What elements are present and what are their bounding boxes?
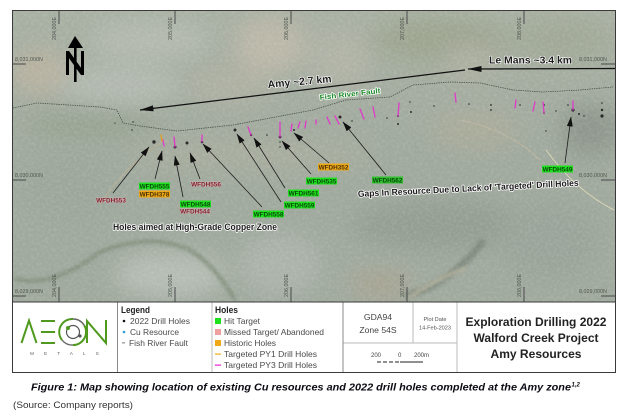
map title: Exploration Drilling 2022 xyxy=(466,316,606,329)
drill holes xyxy=(114,101,604,148)
plot date: Plot Date xyxy=(423,317,447,323)
grid coordinate labels: 207,000E xyxy=(400,274,406,297)
grid coordinate labels: 8,031,000N xyxy=(15,57,43,63)
hole label: WFDH559: WFDH559 xyxy=(285,202,315,209)
legend list: Legend xyxy=(121,305,150,315)
hole label: WFDH544: WFDH544 xyxy=(180,208,210,215)
grid coordinate labels: 204,000E xyxy=(52,274,58,297)
holes legend: Targeted PY1 Drill Holes xyxy=(224,349,317,359)
grid ticks xyxy=(12,10,615,302)
label: Amy distance: Amy ~2.7 km xyxy=(267,73,332,91)
river channels and road xyxy=(14,240,484,300)
leader arrows xyxy=(113,117,571,207)
hole label: WFDH555: WFDH555 xyxy=(140,183,170,190)
panel: legend strip xyxy=(12,302,615,372)
terrain patches xyxy=(10,17,620,299)
grid coordinate labels xyxy=(15,17,607,297)
grid coordinate labels: 8,029,000N xyxy=(579,289,607,295)
hole label: WFDH535: WFDH535 xyxy=(307,178,337,185)
plot date: 14-Feb-2023 xyxy=(419,326,451,332)
map datum: GDA94 xyxy=(364,312,392,322)
hole label: WFDH553: WFDH553 xyxy=(96,197,126,204)
grid coordinate labels: 205,000E xyxy=(168,274,174,297)
figure caption: 1,2 xyxy=(572,382,581,388)
targeted PY3 drill traces xyxy=(161,93,573,147)
annotation: high-grade copper holes: Holes aimed at High-Grade Copper Zone xyxy=(113,222,277,232)
grid coordinate labels: 206,000E xyxy=(284,17,290,40)
label: Fish River Fault: Fish River Fault xyxy=(319,86,381,102)
panel: satellite map xyxy=(10,10,620,302)
icon: north arrow xyxy=(66,36,84,82)
map title xyxy=(466,316,606,361)
logo: Aeon Metals: METALS xyxy=(30,351,109,357)
annotation: gaps in resource: Gaps In Resource Due to Lack of 'Targeted' Drill Holes xyxy=(358,178,579,199)
grid coordinate labels: 204,000E xyxy=(52,17,58,40)
holes legend: Historic Holes xyxy=(224,338,276,348)
figure caption: Figure 1: Map showing location of existing Cu resources and 2022 drill holes completed at the Amy zone xyxy=(31,382,571,394)
scale bar: 200m xyxy=(414,353,429,359)
grid coordinate labels: 205,000E xyxy=(168,17,174,40)
arrow: Amy extent xyxy=(140,70,465,110)
grid coordinate labels: 8,029,000N xyxy=(15,289,43,295)
scale bar xyxy=(371,353,429,362)
map title: Walford Creek Project xyxy=(474,332,599,345)
hole label: WFDH352: WFDH352 xyxy=(319,164,349,171)
fault line xyxy=(13,82,613,131)
hole label: WFDH562: WFDH562 xyxy=(373,177,403,184)
grid coordinate labels: 208,000E xyxy=(517,274,523,297)
holes legend xyxy=(215,305,324,370)
grid coordinate labels: 207,000E xyxy=(400,17,406,40)
map datum xyxy=(359,312,397,335)
hole label: WFDH378: WFDH378 xyxy=(140,191,170,198)
hole label: WFDH558: WFDH558 xyxy=(254,211,284,218)
grid coordinate labels: 206,000E xyxy=(284,274,290,297)
holes legend: Hit Target xyxy=(224,316,261,326)
scale bar: 0 xyxy=(398,353,402,359)
grid coordinate labels: 8,030,000N xyxy=(15,173,43,179)
label: Le Mans distance: Le Mans ~3.4 km xyxy=(489,54,572,66)
holes legend: Holes xyxy=(215,305,238,315)
map title: Amy Resources xyxy=(490,348,582,361)
source note: (Source: Company reports) xyxy=(13,399,133,410)
hole label: WFDH549: WFDH549 xyxy=(543,166,573,173)
hole label: WFDH561: WFDH561 xyxy=(289,190,319,197)
hole label: WFDH548: WFDH548 xyxy=(181,201,211,208)
scale bar: 200 xyxy=(371,353,382,359)
legend list: 2022 Drill Holes xyxy=(130,316,190,326)
grid coordinate labels: 8,031,000N xyxy=(579,57,607,63)
hole label: WFDH556: WFDH556 xyxy=(191,181,221,188)
legend list: Fish River Fault xyxy=(129,338,189,348)
map datum: Zone 54S xyxy=(359,325,397,335)
plot date xyxy=(419,317,451,332)
logo: Aeon Metals xyxy=(22,319,109,357)
grid coordinate labels: 8,030,000N xyxy=(579,173,607,179)
legend list xyxy=(121,305,190,348)
grid coordinate labels: 208,000E xyxy=(517,17,523,40)
holes legend: Missed Target/ Abandoned xyxy=(224,327,324,337)
holes legend: Targeted PY3 Drill Holes xyxy=(224,360,317,370)
arrow: Le Mans extent xyxy=(468,68,615,70)
legend list: Cu Resource xyxy=(130,327,179,337)
